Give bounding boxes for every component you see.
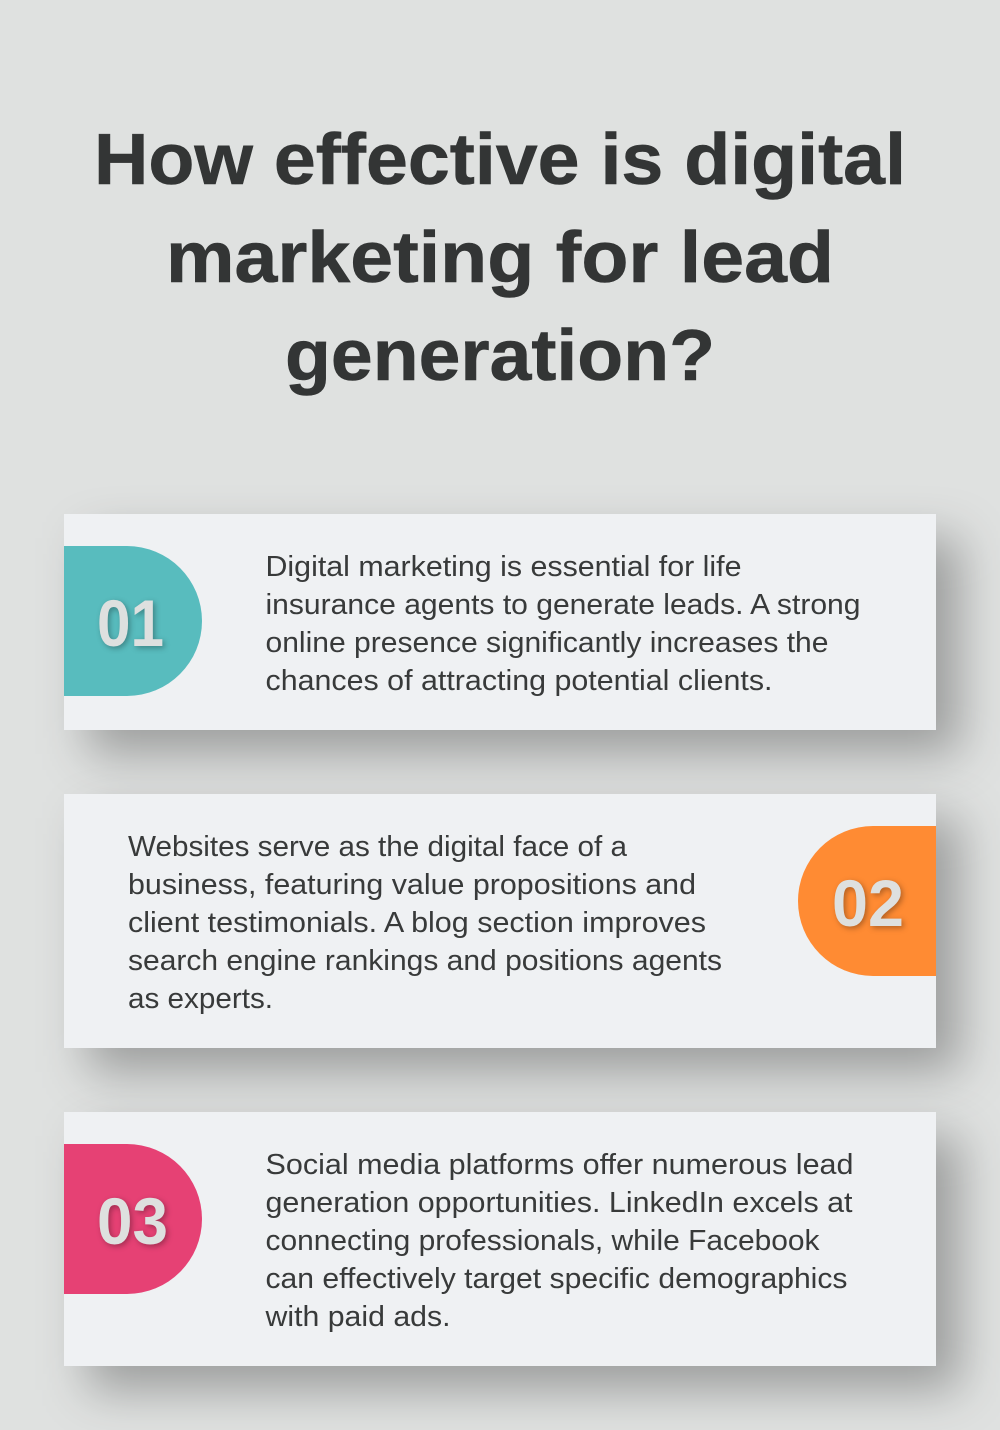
title: marketing for lead bbox=[166, 218, 834, 298]
text: step 01 description bbox=[266, 551, 860, 697]
badge: 02 bbox=[798, 826, 936, 976]
badge: 02: 02 bbox=[832, 866, 904, 940]
text: step 03 description: can effectively target specific demographics bbox=[266, 1263, 848, 1295]
text: step 02 description: client testimonials. A blog section improves bbox=[128, 907, 706, 939]
panel: step 01 bbox=[64, 514, 960, 754]
text: step 02 description: Websites serve as the digital face of a bbox=[128, 831, 628, 863]
text: step 03 description: Social media platforms offer numerous lead bbox=[266, 1149, 854, 1181]
text: step 02 description: search engine rankings and positions agents bbox=[128, 945, 722, 977]
text: step 03 description: with paid ads. bbox=[264, 1301, 450, 1333]
badge: 03: 03 bbox=[97, 1184, 168, 1258]
badge: 03 bbox=[64, 1144, 202, 1294]
text: step 01 description: chances of attracting potential clients. bbox=[266, 665, 772, 697]
text: step 02 description: business, featuring value propositions and bbox=[128, 869, 696, 901]
badge: 01: 01 bbox=[97, 586, 164, 660]
text: step 03 description: connecting professionals, while Facebook bbox=[266, 1225, 820, 1257]
text: step 02 description: as experts. bbox=[128, 983, 273, 1015]
text: step 03 description: generation opportunities. LinkedIn excels at bbox=[266, 1187, 852, 1219]
title bbox=[94, 120, 906, 396]
text: step 01 description: insurance agents to generate leads. A strong bbox=[266, 589, 860, 621]
text: step 02 description bbox=[128, 831, 722, 1015]
title: How effective is digital bbox=[94, 120, 906, 200]
text: step 03 description bbox=[264, 1149, 854, 1333]
title: generation? bbox=[285, 316, 715, 396]
panel: step 02 bbox=[64, 794, 960, 1072]
panel: step 03 bbox=[64, 1112, 960, 1390]
text: step 01 description: Digital marketing is essential for life bbox=[266, 551, 742, 583]
badge: 01 bbox=[64, 546, 202, 696]
text: step 01 description: online presence significantly increases the bbox=[266, 627, 828, 659]
